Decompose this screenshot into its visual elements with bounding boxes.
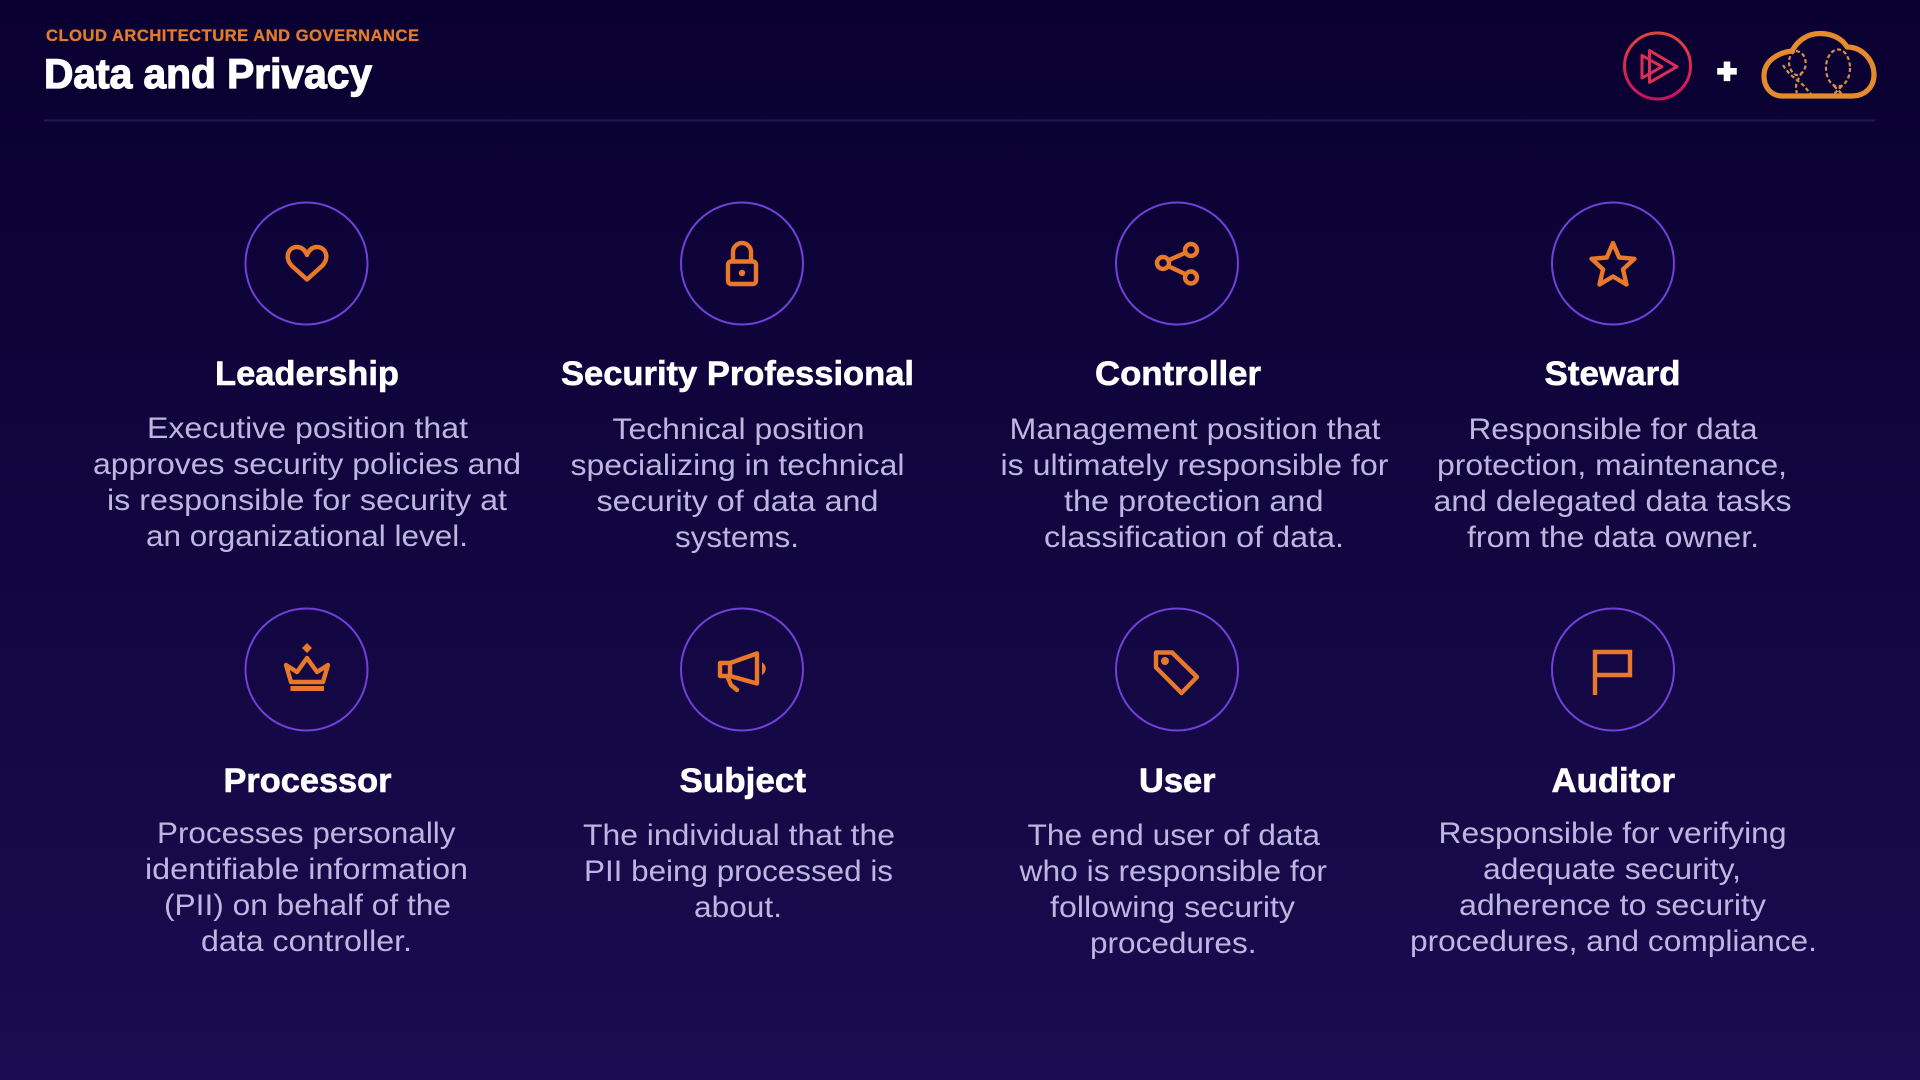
icon: star	[1592, 243, 1634, 284]
card: Leadership	[93, 202, 521, 553]
description: identifiable information	[145, 853, 468, 886]
description: following security	[1050, 891, 1295, 924]
description: and delegated data tasks	[1434, 485, 1792, 518]
description: Processes personally	[157, 817, 456, 850]
description	[583, 819, 895, 924]
description: security of data and	[596, 485, 878, 518]
header	[44, 27, 1875, 122]
heading: Leadership	[215, 355, 399, 393]
logo: play circle	[1624, 33, 1690, 99]
description: Executive position that	[147, 412, 469, 445]
plus sign	[1717, 62, 1737, 81]
heading: Security Professional	[561, 355, 914, 393]
description: protection, maintenance,	[1437, 449, 1787, 482]
divider	[44, 120, 1875, 122]
description: The individual that the	[583, 819, 895, 852]
description: approves security policies and	[93, 448, 521, 481]
icon: megaphone	[720, 654, 766, 690]
card: User	[1018, 608, 1327, 960]
description: from the data owner.	[1467, 521, 1759, 554]
description: classification of data.	[1044, 521, 1344, 554]
description: The end user of data	[1028, 819, 1320, 852]
card: Controller	[1000, 202, 1388, 554]
icon: lock	[728, 243, 756, 284]
description	[1410, 817, 1817, 958]
description: who is responsible for	[1018, 855, 1327, 888]
icon: tag	[1156, 652, 1197, 693]
heading: Controller	[1095, 355, 1261, 393]
description: the protection and	[1064, 485, 1324, 518]
description: about.	[694, 891, 782, 924]
description	[570, 413, 904, 554]
logo: cloud with balloons	[1764, 34, 1874, 96]
description: Technical position	[612, 413, 864, 446]
description	[1018, 819, 1327, 960]
description	[145, 817, 468, 958]
description: Responsible for verifying	[1438, 817, 1786, 850]
heading: Auditor	[1552, 762, 1675, 800]
description: data controller.	[201, 925, 412, 958]
description	[1434, 413, 1792, 554]
description: (PII) on behalf of the	[164, 889, 451, 922]
card: Auditor	[1410, 608, 1817, 958]
icon: heart	[288, 247, 326, 280]
icon: share nodes	[1157, 244, 1197, 284]
title: Data and Privacy	[44, 50, 373, 97]
heading: Processor	[224, 762, 392, 800]
eyebrow: CLOUD ARCHITECTURE AND GOVERNANCE	[46, 27, 419, 45]
description: systems.	[675, 521, 799, 554]
card: Security Professional	[561, 202, 914, 554]
description: PII being processed is	[584, 855, 893, 888]
description: Management position that	[1010, 413, 1381, 446]
card: Processor	[145, 608, 468, 958]
description: is responsible for security at	[107, 484, 508, 517]
description: adherence to security	[1459, 889, 1766, 922]
card: Subject	[583, 608, 895, 924]
description	[1000, 413, 1388, 554]
heading: Subject	[680, 762, 806, 800]
description: is ultimately responsible for	[1000, 449, 1388, 482]
description	[93, 412, 521, 553]
icon: flag	[1595, 652, 1630, 695]
description: Responsible for data	[1468, 413, 1758, 446]
heading: User	[1139, 762, 1216, 800]
heading: Steward	[1544, 355, 1680, 393]
description: an organizational level.	[146, 520, 468, 553]
description: specializing in technical	[570, 449, 904, 482]
description: procedures.	[1090, 927, 1256, 960]
card: Steward	[1434, 202, 1792, 554]
description: procedures, and compliance.	[1410, 925, 1817, 958]
icon: crown	[286, 643, 328, 691]
description: adequate security,	[1483, 853, 1741, 886]
